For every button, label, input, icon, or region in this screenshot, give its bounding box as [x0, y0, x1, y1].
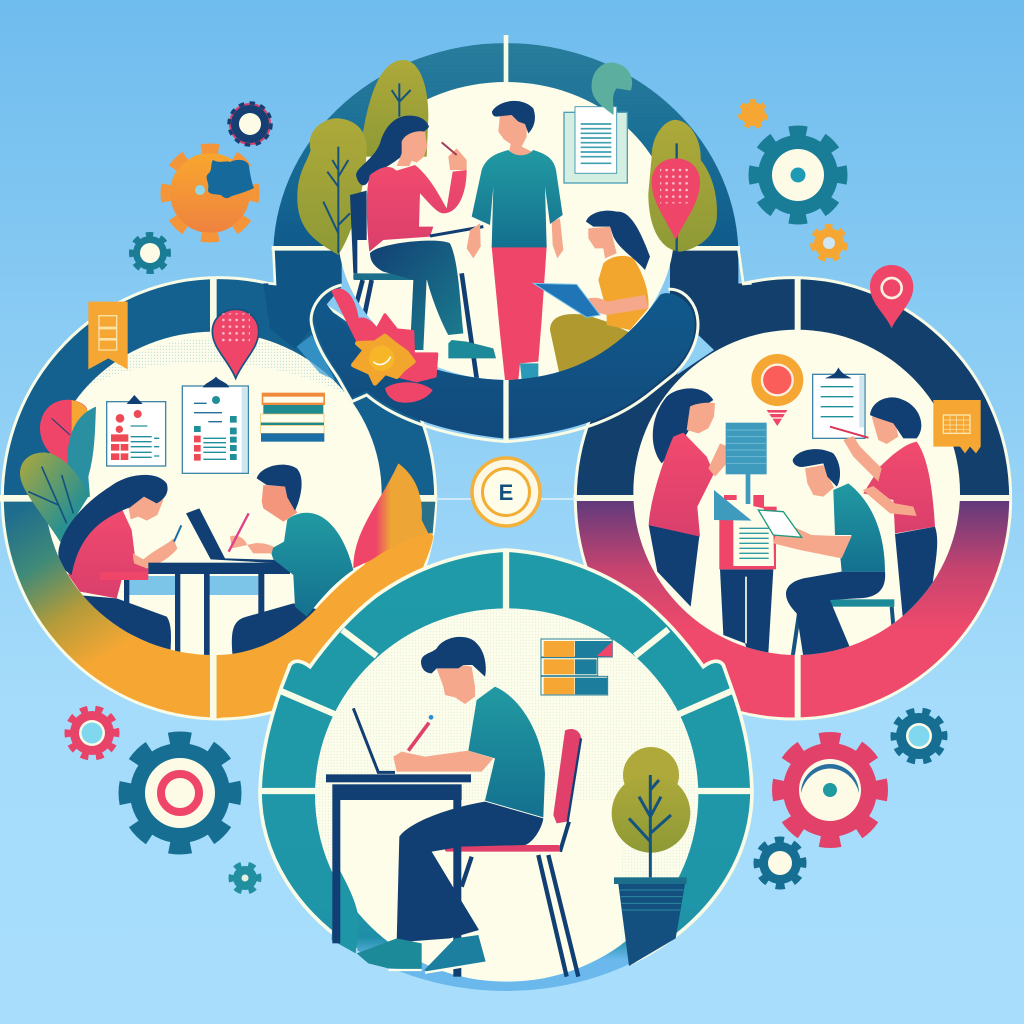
student shirt: [468, 687, 545, 817]
halftone gap: [297, 335, 335, 380]
teal wave left: [332, 860, 359, 953]
left ring lower half: [3, 498, 435, 718]
student arm: [393, 751, 493, 772]
gear: navy crimson top: [229, 103, 271, 145]
standing man arms hands: [467, 218, 563, 258]
map pin: [652, 158, 700, 240]
woman hair: [58, 475, 168, 575]
man hands: [230, 536, 273, 553]
gear: teal lower: [756, 840, 804, 886]
gear: tiny teal: [231, 864, 259, 892]
top ring lower left segment: [263, 248, 342, 349]
student face: [437, 665, 475, 704]
top ring dividers: [272, 35, 740, 248]
map pin: [212, 309, 259, 378]
calendar note: [933, 400, 981, 453]
seated man arm: [773, 527, 852, 558]
flower: [333, 290, 437, 403]
bottom inner circle: [315, 608, 698, 982]
man hair: [257, 465, 302, 511]
bottom inner halftone: [315, 608, 698, 982]
woman trousers: [83, 596, 171, 650]
left ring dividers: [0, 277, 437, 720]
bookmark icon: [88, 302, 128, 369]
woman face: [128, 494, 163, 521]
gear: crimson lower left: [68, 708, 116, 758]
standing man sweater: [472, 150, 563, 247]
top ring lower right segment: [670, 248, 750, 350]
faint connector: [436, 498, 575, 500]
right woman blouse: [863, 442, 935, 533]
right ring outline: [575, 278, 1011, 719]
seated woman hair back: [356, 116, 429, 185]
left ring teal patch: [421, 502, 435, 538]
desk top: [148, 563, 290, 574]
chair seat: [100, 572, 148, 580]
gear: orange small: [812, 226, 846, 260]
desk: [326, 774, 471, 977]
seated girl hair: [586, 211, 650, 270]
seated woman trousers: [370, 241, 463, 350]
seated girl arm: [578, 295, 648, 315]
target bulb icon: [751, 354, 803, 426]
right ring dividers: [573, 277, 1012, 720]
plant leaves left: [20, 400, 96, 547]
clipboard two: [182, 377, 248, 473]
top ring outline sides: [268, 248, 752, 284]
panel: bottom circle, student writing at a desk: [258, 550, 753, 991]
top inner circle: [338, 82, 674, 380]
gear: big teal top right: [754, 130, 842, 220]
panel: left circle, two students at a desk: [0, 277, 437, 720]
sneaker: [448, 340, 496, 358]
student pencil: [408, 715, 433, 751]
seated girl tablet: [533, 283, 600, 317]
left ring upper half: [3, 278, 435, 498]
standing figure with paper: [714, 490, 777, 653]
bar chart icon: [541, 639, 612, 695]
desk and students: [58, 465, 353, 660]
standing man face: [498, 115, 532, 155]
seated girl shirt: [598, 256, 649, 330]
seated man hair: [793, 449, 840, 487]
right woman raised arm: [843, 436, 882, 482]
crescent divider: [498, 380, 514, 440]
seated man stool: [793, 599, 894, 657]
chair: [350, 191, 477, 378]
badge inner ring: [482, 468, 530, 516]
left inner circle: [45, 332, 382, 655]
left woman blouse: [649, 433, 714, 537]
bottom ring dividers: [258, 550, 753, 791]
pencil: [830, 427, 868, 438]
paper held: [758, 510, 802, 537]
top ring halftone: [273, 43, 738, 248]
badge rings: [472, 458, 540, 526]
seated man shirt: [833, 483, 885, 572]
laptop keys: [225, 553, 255, 556]
seated girl face: [588, 227, 617, 258]
standing man hair: [492, 101, 535, 133]
blue document: [726, 423, 767, 504]
left ring outline: [2, 278, 436, 719]
chair: [445, 729, 581, 977]
trees left: [297, 60, 428, 255]
green curl: [592, 62, 632, 115]
standing man trousers: [492, 247, 547, 380]
map pin: [870, 265, 913, 328]
light gap triangle: [677, 335, 714, 375]
left woman face: [687, 403, 715, 433]
desk legs and panels: [124, 574, 264, 656]
man sweater: [270, 513, 353, 617]
bottom ring: [260, 550, 752, 991]
gear: teal left small: [132, 234, 168, 272]
woman arm: [133, 538, 177, 568]
woman pen: [174, 525, 181, 542]
badge letter: E: [499, 480, 513, 505]
students: [350, 101, 650, 380]
panel: right circle, three students with papers: [573, 265, 1012, 720]
right woman hand on shoulder: [863, 486, 917, 516]
seated woman sweater: [367, 165, 467, 252]
student hair: [421, 637, 486, 677]
students: [649, 388, 937, 657]
tablet: [430, 227, 483, 236]
left woman hair: [653, 388, 713, 463]
clean lower area: [335, 800, 622, 980]
gear: teal right: [894, 710, 944, 762]
right inner circle: [633, 330, 960, 655]
seated woman face: [397, 131, 427, 166]
gear: big teal lower left: [124, 738, 236, 848]
laptop: [353, 708, 395, 772]
left inner halftone: [83, 337, 363, 407]
gear: small orange top right: [740, 101, 766, 127]
laptop: [186, 508, 280, 563]
man face: [262, 485, 297, 522]
stack of books: [261, 393, 325, 442]
gear: big crimson lower right: [778, 738, 882, 842]
right ring lower half: [576, 498, 1010, 718]
orange band: [217, 533, 433, 718]
right ring upper half: [576, 278, 1010, 498]
right woman face: [872, 417, 898, 444]
flame leaf: [353, 463, 428, 568]
right woman trousers: [895, 527, 937, 623]
tree right: [648, 120, 717, 252]
seated man face: [805, 465, 834, 497]
student trousers: [397, 802, 543, 942]
top ring upper arc: [273, 43, 738, 248]
seated girl trousers: [550, 314, 632, 377]
clipboard one: [107, 395, 166, 466]
panel: top circle, three students under trees: [263, 35, 752, 442]
left woman trousers: [649, 525, 699, 607]
man trousers: [232, 603, 316, 654]
bottom ring outline: [260, 550, 752, 964]
right woman hair: [870, 397, 921, 438]
sneakers: [357, 935, 486, 973]
clipboard: [813, 367, 865, 438]
crescent outline: [311, 285, 698, 442]
document icon: [564, 107, 627, 183]
center badge E: [436, 458, 575, 526]
standing man shoe: [520, 363, 538, 380]
man pen: [229, 513, 249, 552]
woman shirt: [68, 508, 148, 598]
potted plant: [612, 747, 690, 966]
crescent band: [314, 293, 695, 438]
seated woman hand and pen: [442, 142, 467, 170]
seated man trousers: [786, 572, 885, 657]
left woman hand: [708, 444, 726, 476]
gear: big orange: [166, 148, 254, 238]
